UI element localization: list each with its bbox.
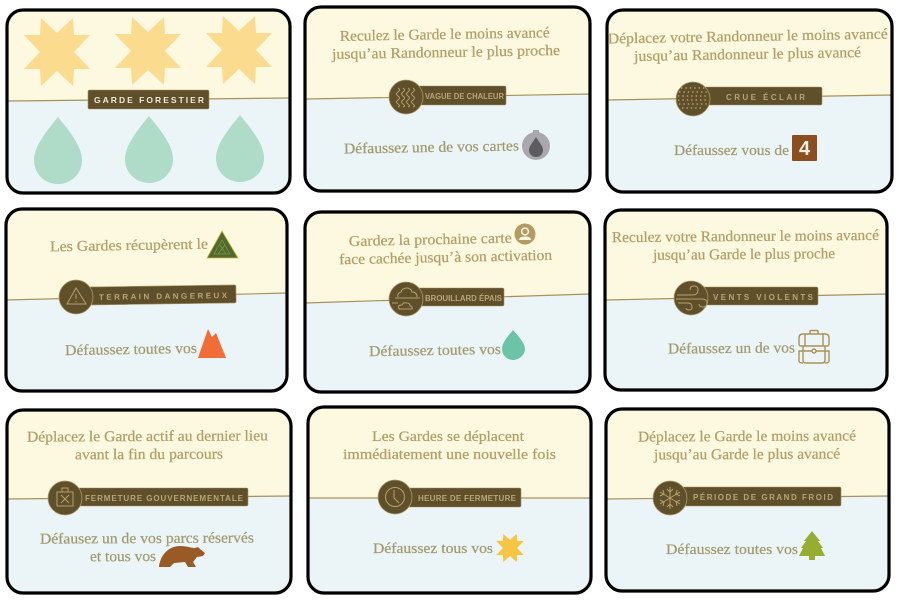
discard text: Défausez un de vos parcs réservés <box>40 530 254 548</box>
icon: discard four <box>792 135 817 161</box>
card background <box>7 10 290 193</box>
effect text: Les Gardes récupèrent le <box>50 237 208 255</box>
title plate with closed sign icon <box>48 481 248 515</box>
effect text <box>339 230 553 268</box>
card background <box>605 210 887 390</box>
card background <box>6 209 287 391</box>
effect text <box>331 25 561 63</box>
title plate with closed sign icon: FERMETURE GOUVERNEMENTALE <box>85 494 244 503</box>
effect text: immédiatement une nouvelle fois <box>343 447 556 463</box>
icon: green drop <box>502 330 525 360</box>
effect text <box>612 228 879 264</box>
effect text: Reculez le Garde le moins avancé <box>340 25 550 45</box>
panel: card Vague de chaleur <box>305 7 590 191</box>
title plate with fog icon: BROUILLARD ÉPAIS <box>425 294 503 303</box>
card background <box>607 10 892 192</box>
panel: card Vents violents <box>605 210 887 390</box>
discard text: Défaussez un de vos <box>668 340 795 358</box>
title plate with flood icon: CRUE ÉCLAIR <box>726 93 805 102</box>
effect text: jusqu’au Randonneur le plus proche <box>331 43 561 63</box>
icon: person <box>514 224 536 244</box>
discard text: Défaussez une de vos cartes <box>344 138 519 157</box>
icon: three green drops <box>34 115 264 184</box>
discard text <box>40 530 254 566</box>
icon: three yellow stars <box>24 16 272 86</box>
icon: green triangle <box>207 231 238 258</box>
effect text: Gardez la prochaine carte <box>349 231 512 250</box>
effect text: face cachée jusqu’à son activation <box>339 248 553 268</box>
effect text: Les Gardes se déplacent <box>372 429 525 445</box>
effect text: Déplacez le Garde le moins avancé <box>638 428 856 446</box>
title plate: GARDE FORESTIER <box>94 95 204 105</box>
panel: card Heure de fermeture <box>308 407 591 593</box>
panel: card Brouillard épais <box>305 212 590 392</box>
panel: card Garde forestier <box>7 10 290 193</box>
effect text: jusqu’au Garde le plus avancé <box>653 447 840 463</box>
title plate with heat icon: VAGUE DE CHALEUR <box>425 92 504 101</box>
discard text: et tous vos <box>90 549 156 565</box>
title plate with warning icon <box>59 280 236 314</box>
panel: card Terrain dangereux <box>6 209 287 391</box>
discard text: Défaussez toutes vos <box>65 341 197 359</box>
effect text: jusqu’au Garde le plus proche <box>652 246 835 264</box>
card background <box>305 212 590 392</box>
discard text: Défaussez toutes vos <box>369 342 501 360</box>
panel: card Crue éclair <box>607 10 892 192</box>
icon: green tree <box>799 531 825 560</box>
discard text: Défaussez tous vos <box>373 541 493 557</box>
panel: card Période de grand froid <box>606 409 889 591</box>
effect text: Déplacez le Garde actif au dernier lieu <box>27 428 268 446</box>
card background <box>606 409 889 591</box>
title plate with warning icon: TERRAIN DANGEREUX <box>99 291 228 302</box>
card background <box>7 410 291 593</box>
title plate with clock icon <box>378 480 521 514</box>
icon: grey flask <box>522 130 550 160</box>
title plate with snowflake icon <box>653 481 841 515</box>
icon: yellow star <box>496 534 524 562</box>
title plate with flood icon <box>676 82 822 116</box>
effect text: avant la fin du parcours <box>75 447 223 463</box>
icon: backpack <box>799 330 829 363</box>
effect text: Déplacez votre Randonneur le moins avancé <box>608 27 888 47</box>
title plate with fog icon <box>389 282 504 316</box>
title plate with wind icon <box>674 281 818 315</box>
icon: brown bear <box>159 546 205 567</box>
title plate with heat icon <box>389 80 506 114</box>
title plate with clock icon: HEURE DE FERMETURE <box>418 494 517 503</box>
title plate <box>88 90 209 109</box>
effect text <box>27 428 269 464</box>
card background <box>308 407 591 593</box>
card background <box>305 7 590 191</box>
effect text: jusqu’au Randonneur le plus avancé <box>633 45 862 65</box>
effect text <box>608 27 889 65</box>
title plate with snowflake icon: PÉRIODE DE GRAND FROID <box>693 493 833 502</box>
icon: orange mountain <box>198 329 226 358</box>
icon: discard four: 4 <box>799 138 811 160</box>
discard text: Défaussez vous de <box>674 143 789 159</box>
title plate with wind icon: VENTS VIOLENTS <box>713 293 814 302</box>
effect text: Reculez votre Randonneur le moins avancé <box>612 228 879 246</box>
panel: card Fermeture gouvernementale <box>7 410 291 593</box>
effect text <box>343 429 556 463</box>
effect text <box>638 428 856 464</box>
discard text: Défaussez toutes vos <box>666 542 798 558</box>
